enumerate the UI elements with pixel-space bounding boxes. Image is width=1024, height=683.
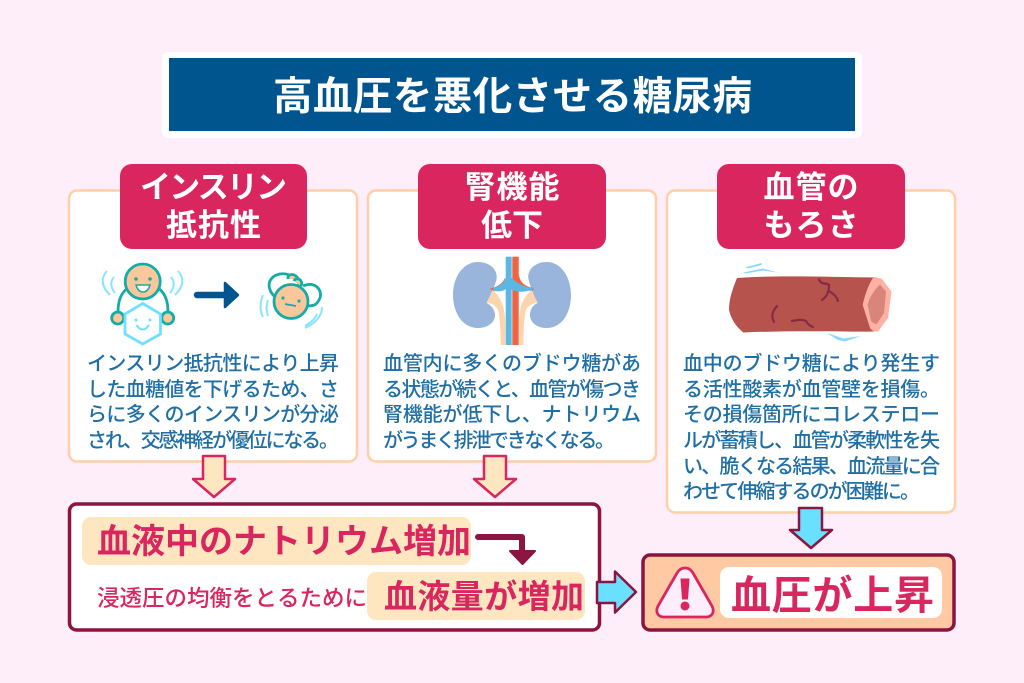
arrow: sodium to blood volume xyxy=(478,537,535,564)
icon: warning triangle xyxy=(657,568,713,617)
text: fragile vessels: その損傷箇所にコレステロー xyxy=(683,403,940,426)
icon: kidneys xyxy=(453,257,571,345)
heading: kidney function: 腎機能 xyxy=(464,170,560,205)
arrow: down from vessel panel xyxy=(790,508,832,548)
panel: insulin resistance xyxy=(69,164,357,462)
text: osmotic balance: 浸透圧の均衡をとるために xyxy=(97,586,367,611)
text: kidney function: 腎機能が低下し、ナトリウム xyxy=(383,403,641,426)
heading: kidney function: 低下 xyxy=(481,208,543,243)
panel: fragile blood vessels xyxy=(667,164,955,512)
panel: kidney function decline xyxy=(368,164,656,462)
panel: sodium and blood volume increase xyxy=(70,504,600,630)
title: 高血圧を悪化させる糖尿病 xyxy=(273,75,752,119)
text: fragile vessels: い、脆くなる結果、血流量に合 xyxy=(683,455,940,478)
text: insulin resistance: した血糖値を下げるため、さ xyxy=(87,378,339,401)
text: fragile vessels: わせて伸縮するのが困難に。 xyxy=(683,480,920,503)
heading: kidney function xyxy=(418,164,606,249)
icon: insulin and cell to resistant cell xyxy=(103,264,322,344)
text: fragile vessels: る活性酸素が血管壁を損傷。 xyxy=(683,378,940,401)
title xyxy=(162,52,862,138)
arrow: down from insulin panel xyxy=(193,456,235,497)
text: insulin resistance xyxy=(87,352,339,452)
text: insulin resistance: らに多くのインスリンが分泌 xyxy=(87,403,339,426)
callout: blood pressure rises: 血圧が上昇 xyxy=(731,574,934,618)
text: insulin resistance: インスリン抵抗性により上昇 xyxy=(87,352,339,375)
icon: damaged vessel xyxy=(729,263,892,342)
heading: fragile vessels: もろさ xyxy=(764,208,858,243)
text: kidney function: がうまく排泄できなくなる。 xyxy=(383,429,615,452)
text: fragile vessels: ルが蓄積し、血管が柔軟性を失 xyxy=(683,429,940,452)
panel: blood pressure rises xyxy=(643,555,954,630)
heading: insulin resistance xyxy=(120,164,307,249)
text: kidney function: る状態が続くと、血管が傷つき xyxy=(383,378,641,401)
callout: sodium increase: 血液中のナトリウム増加 xyxy=(97,523,471,561)
text: insulin resistance: され、交感神経が優位になる。 xyxy=(87,428,339,452)
heading: insulin resistance: インスリン xyxy=(140,170,287,205)
arrow: down from kidney panel xyxy=(474,456,516,497)
heading: insulin resistance: 抵抗性 xyxy=(166,208,261,243)
heading: fragile vessels xyxy=(717,164,905,249)
text: fragile vessels: 血中のブドウ糖により発生す xyxy=(683,351,940,375)
heading: fragile vessels: 血管の xyxy=(764,170,858,205)
arrow: right to blood pressure xyxy=(597,572,636,612)
text: kidney function xyxy=(383,351,641,452)
callout: blood volume increase: 血液量が増加 xyxy=(384,578,584,615)
text: fragile vessels xyxy=(683,351,940,503)
text: kidney function: 血管内に多くのブドウ糖があ xyxy=(383,351,641,375)
